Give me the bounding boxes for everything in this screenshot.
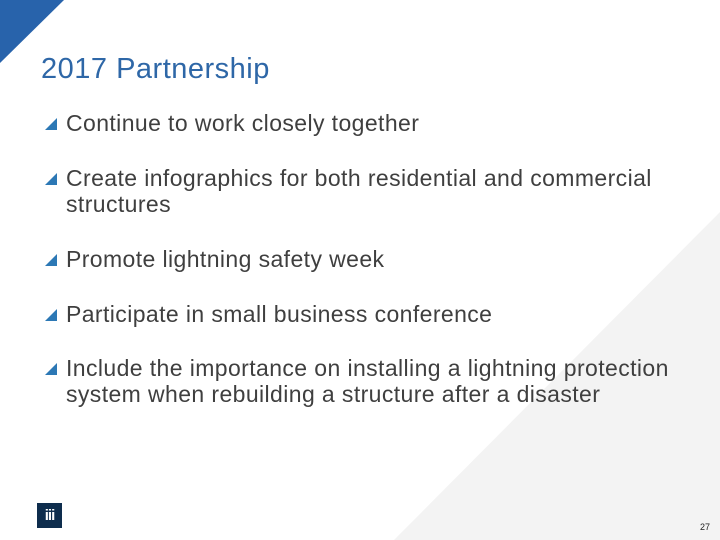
page number: 27: [700, 522, 710, 532]
logo: iii: [45, 507, 54, 524]
text 3: Promote lightning safety week: [66, 246, 384, 272]
blue corner triangle: [0, 0, 64, 63]
bullet 1: [45, 118, 57, 130]
logo: [37, 503, 62, 528]
gray corner triangle: [394, 212, 720, 540]
text 4: Participate in small business conference: [66, 301, 492, 327]
bullet 4: [45, 309, 57, 321]
title: 2017 Partnership: [41, 53, 270, 85]
text 5: Include the importance on installing a lightning protection system when rebuilding a structure after a disaster: [66, 355, 669, 407]
text 2: Create infographics for both residential and commercial structures: [66, 165, 652, 217]
text 1: Continue to work closely together: [66, 110, 419, 136]
bullet 3: [45, 254, 57, 266]
bullet 5: [45, 363, 57, 375]
bullet 2: [45, 173, 57, 185]
